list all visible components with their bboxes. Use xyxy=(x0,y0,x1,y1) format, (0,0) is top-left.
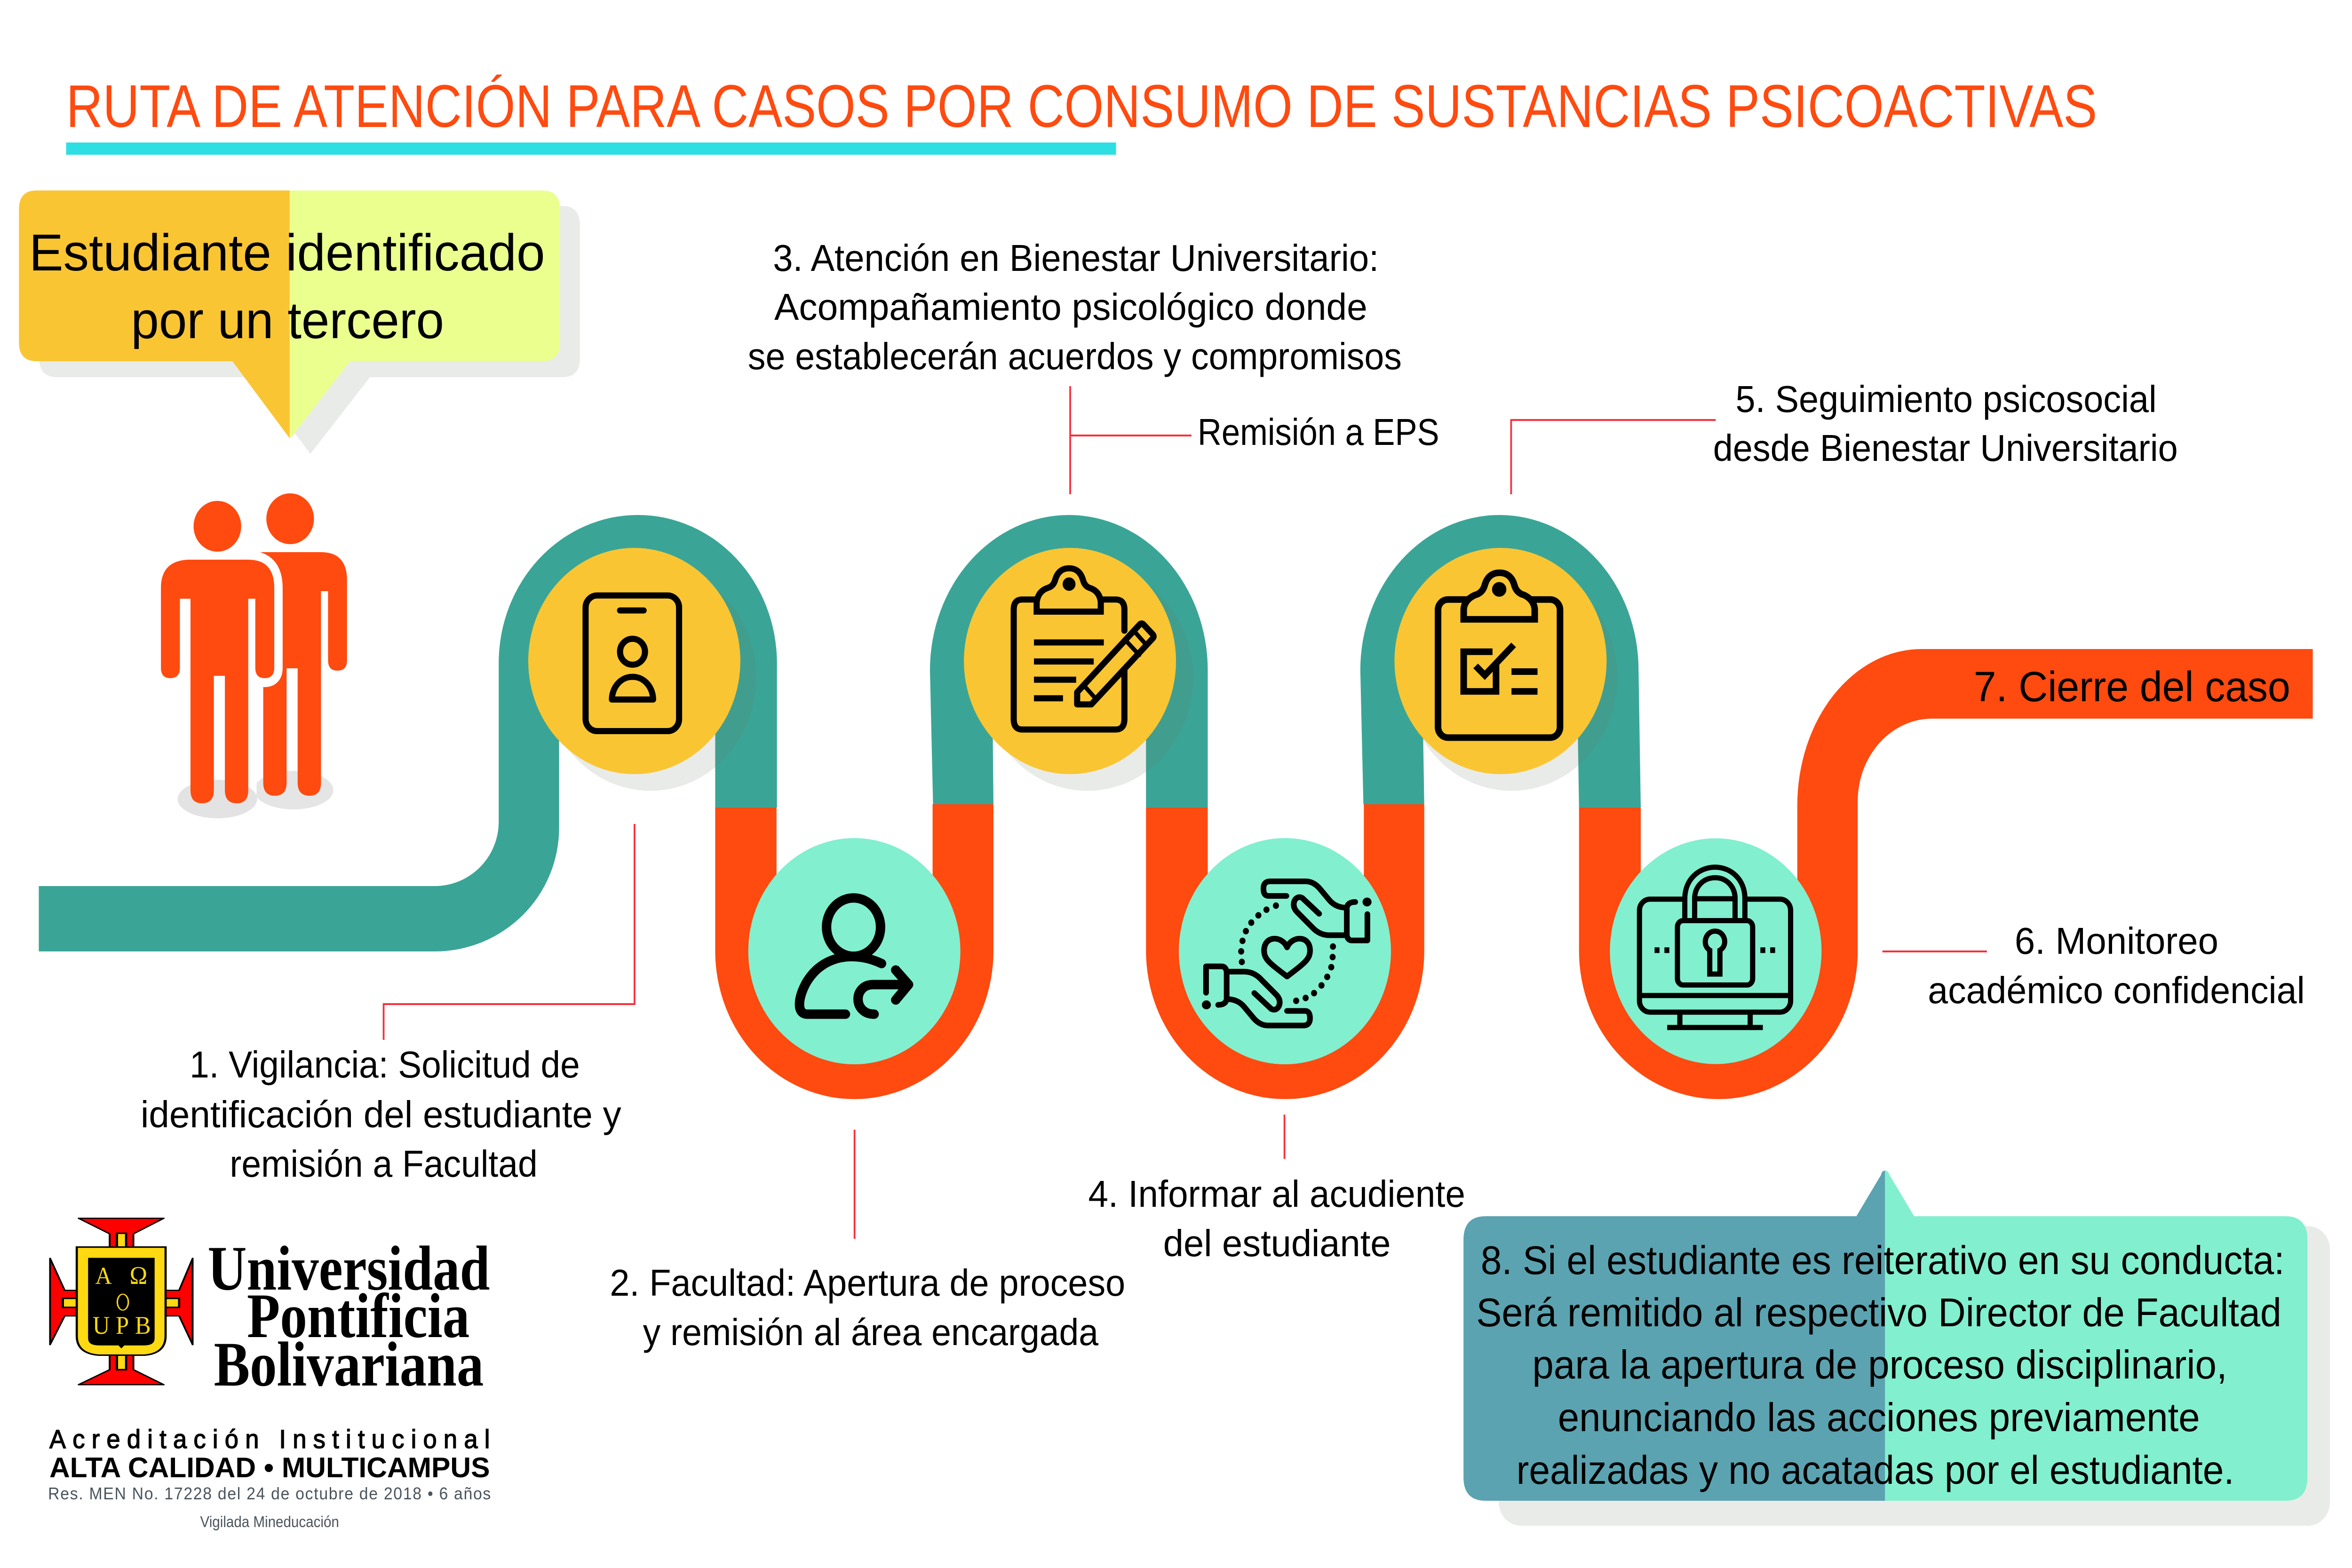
step 5: yellow circle with checklist clipboard icon xyxy=(1394,548,1618,791)
step 2: mint circle with user referral icon xyxy=(748,838,961,1064)
step 2 text: y remisión al área encargada xyxy=(643,1312,1099,1354)
accreditation text: Vigilada Mineducación xyxy=(200,1513,339,1530)
step 1 text: remisión a Facultad xyxy=(230,1143,538,1185)
bubble text line 2: por un tercero xyxy=(131,291,444,349)
logo: university crest: A xyxy=(95,1262,112,1289)
step 3 text xyxy=(748,238,1402,378)
callout text: 8. Si el estudiante es reiterativo en su conducta: xyxy=(1481,1238,2285,1283)
step 1 text: 1. Vigilancia: Solicitud de xyxy=(190,1044,580,1086)
logo: university name xyxy=(208,1233,490,1400)
callout text: realizadas y no acatadas por el estudiante. xyxy=(1517,1448,2234,1493)
icon: checklist clipboard xyxy=(1438,573,1560,737)
icon: user with arrow xyxy=(800,898,908,1014)
title: RUTA DE ATENCIÓN PARA CASOS POR CONSUMO DE SUSTANCIAS PSICOACTIVAS xyxy=(66,73,2097,140)
speech bubble: estudiante identificado xyxy=(19,190,580,454)
connector line: step 1 xyxy=(384,824,635,1040)
step 3 text: se establecerán acuerdos y compromisos xyxy=(748,336,1402,378)
connector line: step 2 xyxy=(854,1130,856,1239)
title underline xyxy=(66,143,1116,155)
step 1 text xyxy=(141,1044,621,1185)
accreditation text: Acreditación Institucional xyxy=(49,1424,490,1454)
logo: university crest: Ω xyxy=(130,1262,147,1290)
step 1: yellow circle with ID badge icon xyxy=(528,548,756,791)
bubble text line 1: Estudiante identificado xyxy=(29,223,545,282)
connector line: step 5 xyxy=(1511,420,1716,494)
icon: padlock on monitor xyxy=(1639,867,1791,1028)
step 5 text: desde Bienestar Universitario xyxy=(1713,428,2178,469)
step 5 text: 5. Seguimiento psicosocial xyxy=(1736,379,2157,420)
remisión a EPS text: Remisión a EPS xyxy=(1198,412,1439,453)
logo: university name: Universidad xyxy=(208,1233,490,1304)
icon: ID badge xyxy=(586,595,679,731)
step 7 text: 7. Cierre del caso xyxy=(1974,664,2290,711)
step 4 text xyxy=(1088,1173,1465,1265)
logo: university crest: UPB xyxy=(93,1312,151,1339)
accreditation text: ALTA CALIDAD • MULTICAMPUS xyxy=(49,1452,490,1483)
callout text xyxy=(1476,1238,2285,1493)
step 4: mint circle with caring hands icon xyxy=(1179,838,1391,1064)
callout text: Será remitido al respectivo Director de Facultad xyxy=(1476,1291,2281,1335)
step 6 text xyxy=(1928,920,2305,1012)
logo: university crest xyxy=(50,1218,193,1385)
step 6: mint circle with computer lock icon xyxy=(1610,838,1821,1064)
step 3: yellow circle with clipboard and pencil icon xyxy=(964,548,1193,791)
step 2 text xyxy=(610,1262,1125,1354)
icon: two people xyxy=(161,493,347,818)
step 3 text: 3. Atención en Bienestar Universitario: xyxy=(773,238,1379,279)
step 4 text: 4. Informar al acudiente xyxy=(1088,1173,1465,1215)
step 6 text: académico confidencial xyxy=(1928,970,2305,1012)
icon: hands and heart xyxy=(1205,881,1369,1025)
step 5 text xyxy=(1713,379,2178,469)
accreditation text: Res. MEN No. 17228 del 24 de octubre de 2018 • 6 años xyxy=(48,1484,491,1503)
callout text: para la apertura de proceso disciplinario, xyxy=(1532,1343,2227,1387)
connector line: step 4 xyxy=(1284,1115,1286,1159)
step 3 text: Acompañamiento psicológico donde xyxy=(774,286,1367,328)
connector line: step 6 xyxy=(1883,950,1987,952)
step 6 text: 6. Monitoreo xyxy=(2015,920,2218,962)
step 1 text: identificación del estudiante y xyxy=(141,1094,621,1136)
logo: university name: Pontificia xyxy=(247,1281,469,1351)
icon: clipboard and pencil xyxy=(1014,568,1153,729)
accreditation text xyxy=(48,1424,491,1530)
winding ribbon path xyxy=(39,515,2313,1099)
step 2 text: 2. Facultad: Apertura de proceso xyxy=(610,1262,1125,1304)
callout: step 8 xyxy=(1463,1171,2330,1526)
callout text: enunciando las acciones previamente xyxy=(1558,1395,2200,1440)
logo: university name: Bolivariana xyxy=(214,1329,484,1400)
step 4 text: del estudiante xyxy=(1163,1223,1391,1265)
connector line: step 3 and EPS xyxy=(1070,386,1192,494)
